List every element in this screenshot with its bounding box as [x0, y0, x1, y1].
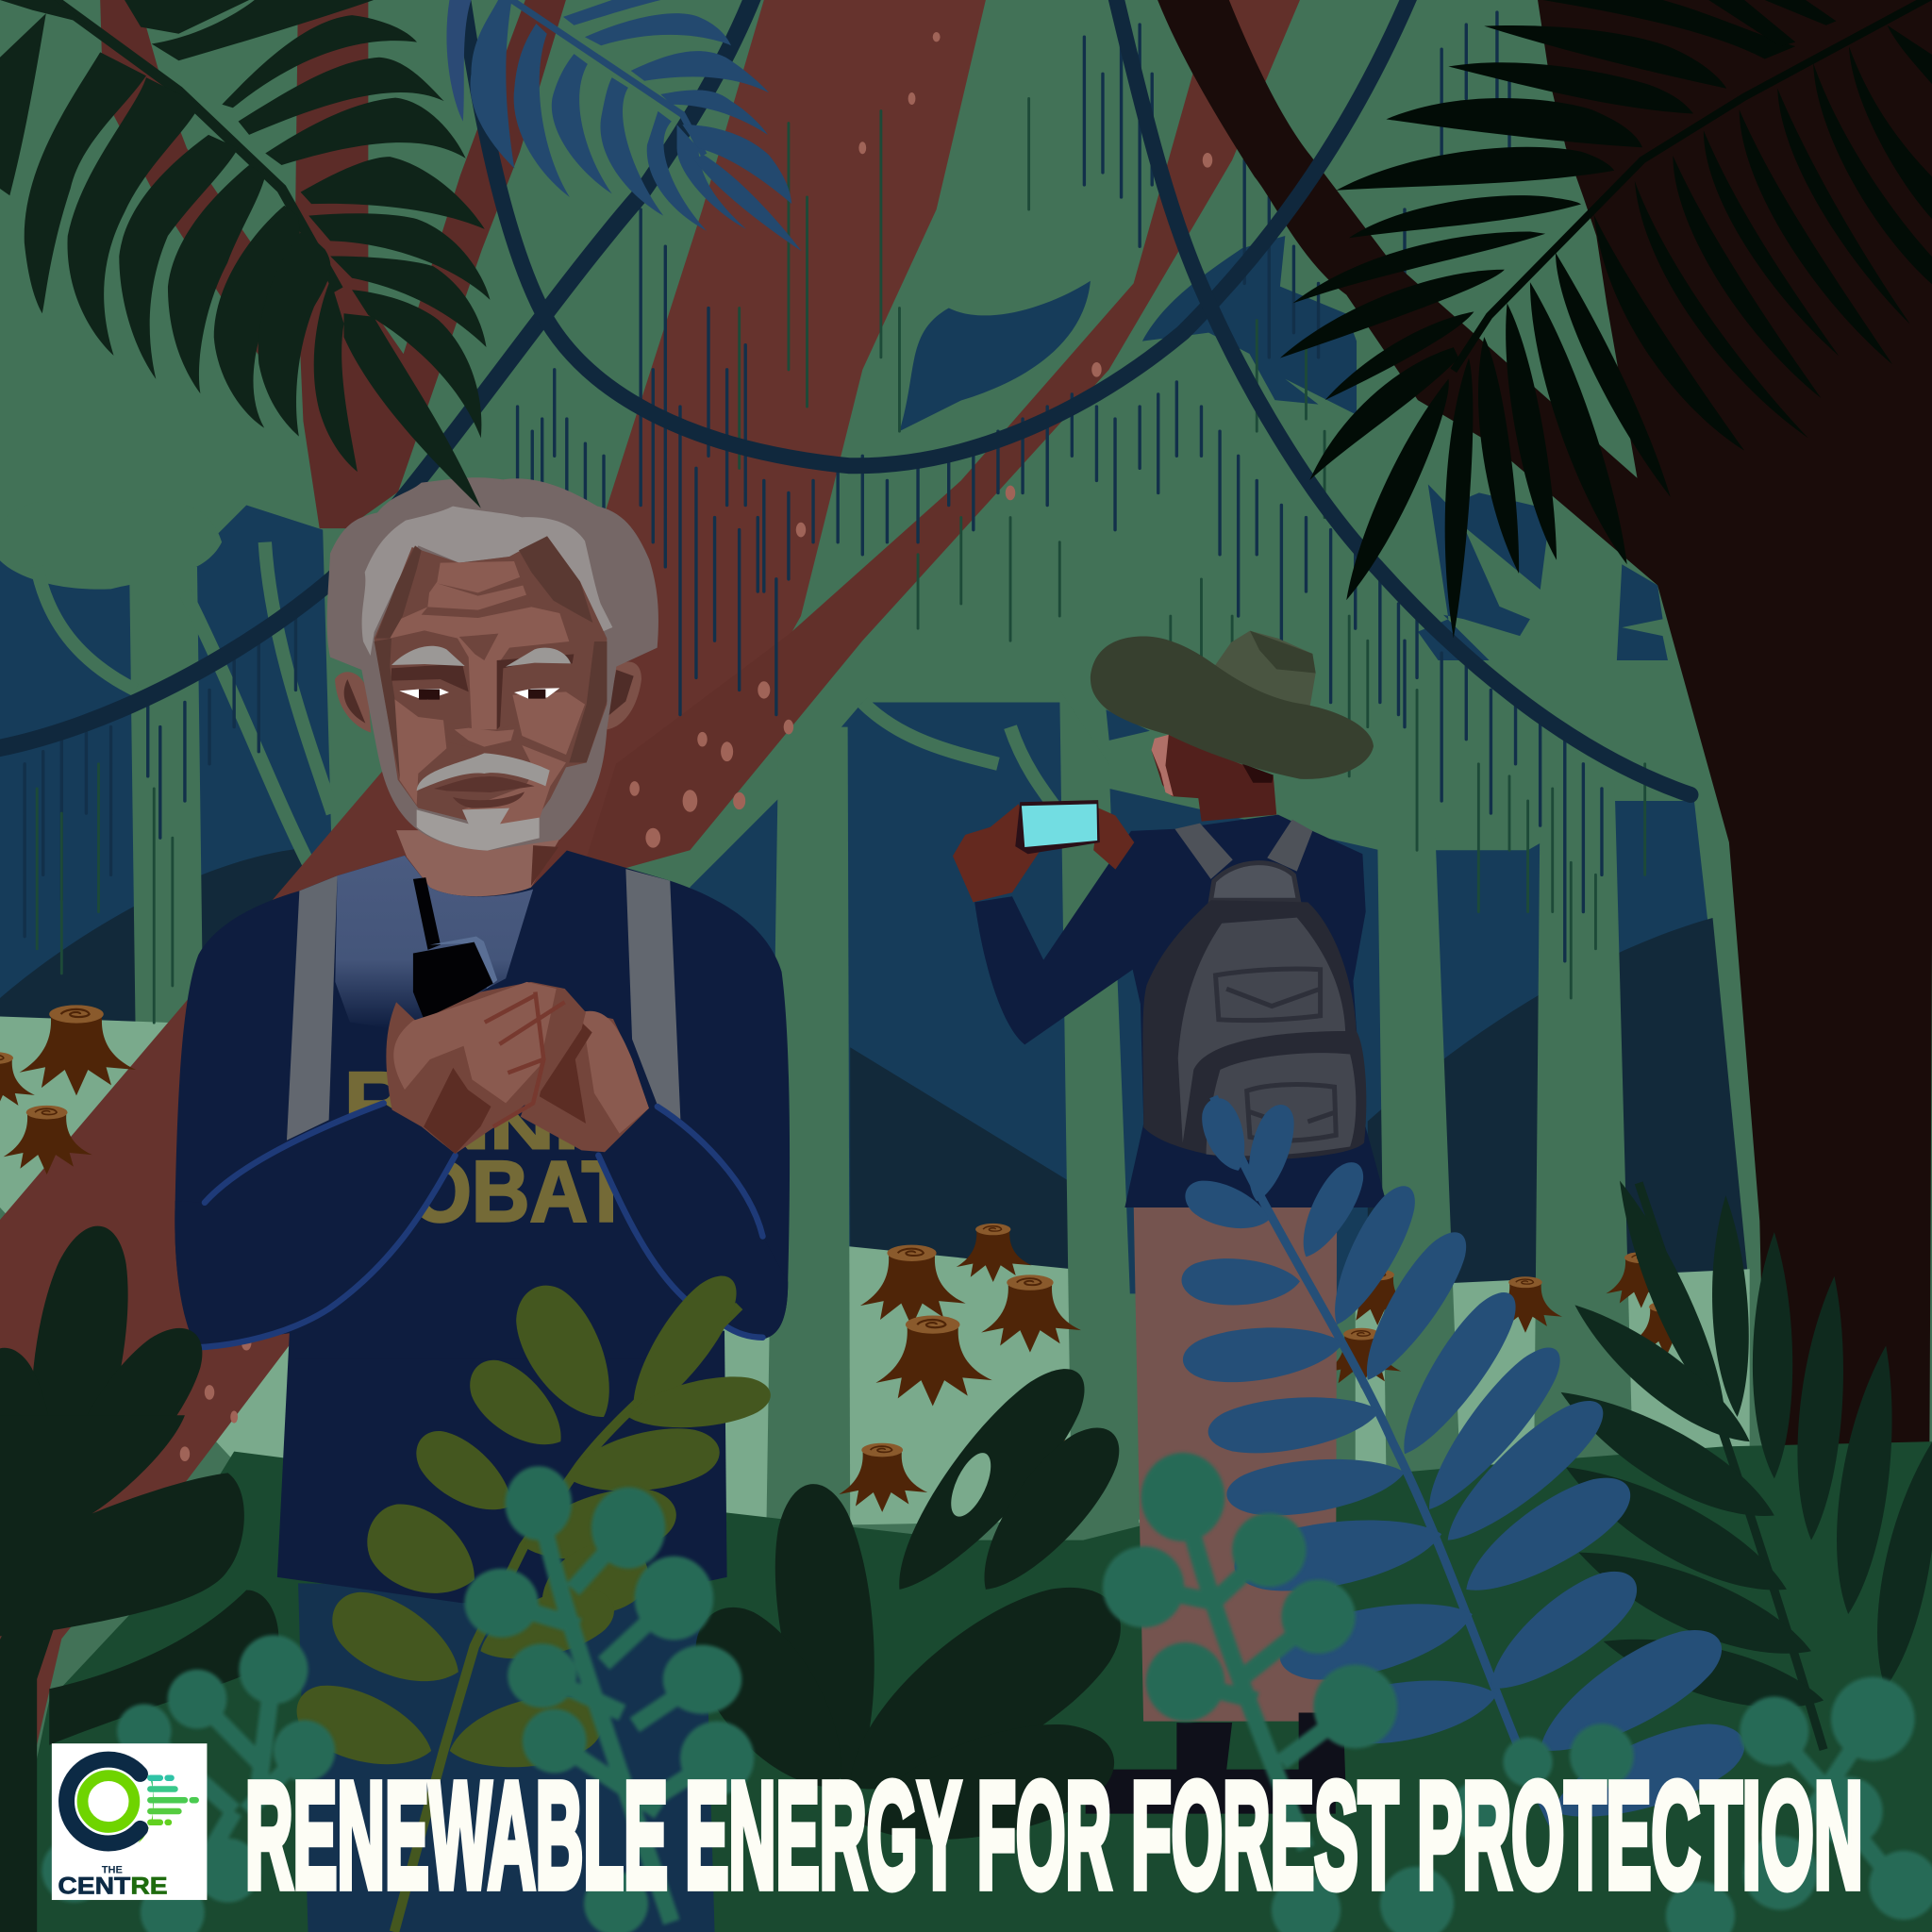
- trousers: [1134, 1201, 1337, 1722]
- phone: [1015, 800, 1100, 854]
- title: FOREST: [1131, 1751, 1398, 1919]
- sleeves: [175, 1103, 788, 1347]
- brown second trunk: [579, 0, 1300, 881]
- bottom left dark plant: [0, 1220, 279, 1932]
- blue patch by face: [1106, 709, 1150, 741]
- forehead wrinkles: [422, 577, 531, 660]
- brown branches behind top left palm: [100, 0, 566, 528]
- top left palm frond: [0, 0, 491, 508]
- title: FOR: [977, 1751, 1111, 1919]
- blue fern: [1179, 1093, 1755, 1842]
- neck: [396, 830, 565, 898]
- logo data lines: [150, 1778, 196, 1823]
- title: [245, 1751, 1863, 1919]
- title: RENEWABLE: [245, 1751, 668, 1919]
- logo teal wedge: [138, 1762, 154, 1843]
- shoes: [1086, 1713, 1345, 1814]
- brown main trunk: [0, 0, 986, 1848]
- title: ENERGY: [685, 1751, 961, 1919]
- eyebrows: [391, 646, 571, 667]
- vest straps: [287, 869, 680, 1141]
- sleeve trim: [196, 1103, 762, 1347]
- shirt lettering: R: [343, 1054, 409, 1155]
- vines: [0, 0, 1690, 794]
- right hand: [521, 1011, 649, 1152]
- far background: central blue hills: [690, 702, 1750, 1293]
- logo: The Centre: CENT RE: [58, 1874, 168, 1900]
- shirt lettering: [343, 1054, 631, 1240]
- ground: pale green clearing: [0, 1017, 1750, 1528]
- head: [1152, 735, 1276, 822]
- centre dark plant: [669, 1347, 1146, 1871]
- trunk spots: [180, 32, 1212, 1461]
- bottom right dark fern: [1546, 1174, 1932, 1750]
- goatee: [417, 808, 540, 851]
- face light planes: [390, 561, 585, 827]
- background leaves: blue: [899, 236, 1668, 660]
- far background: left blue forest: [0, 500, 333, 1047]
- shirt lettering: NNI: [425, 1095, 579, 1161]
- sweater: [175, 850, 790, 1358]
- outer hair and beard: [327, 477, 658, 851]
- teal eucalyptus plants: [42, 1453, 1932, 1932]
- left hand: [386, 982, 586, 1154]
- grey shirt: [335, 856, 533, 1029]
- lower torso: [277, 1331, 727, 1603]
- hands: [953, 804, 1134, 902]
- eyes: [399, 688, 559, 700]
- top right black palm frond: [1280, 0, 1932, 638]
- top blue palm frond: [446, 0, 802, 251]
- lips: [434, 776, 535, 808]
- sleeves and hands: [175, 982, 788, 1347]
- big dark tree on the right: [1158, 0, 1932, 1748]
- logo green ring: [83, 1775, 134, 1827]
- logo: The Centre: [52, 1743, 207, 1900]
- traced upper body: [175, 830, 790, 1358]
- logo C ring: [67, 1759, 150, 1843]
- ground: dark green hill: [0, 1441, 1932, 1932]
- head: [327, 477, 658, 851]
- radio: [413, 877, 497, 1024]
- hat: [1091, 631, 1374, 779]
- hanging moss strands: [25, 12, 1645, 1023]
- backpack: [1142, 820, 1366, 1160]
- person with hat taking a phone photo: [953, 631, 1388, 1814]
- eye sockets: [391, 654, 574, 729]
- face skin: [375, 536, 607, 827]
- moustache: [417, 753, 550, 791]
- shirt lettering: OBAT: [409, 1143, 631, 1240]
- upper body traced: [953, 631, 1388, 1208]
- olive leaf plant: [287, 1262, 774, 1932]
- logo wordmark: THE: [102, 1864, 123, 1875]
- man with radio: [175, 477, 790, 1932]
- nose: [446, 724, 522, 755]
- tree stumps: [0, 1005, 1703, 1512]
- face shadows: [375, 536, 607, 780]
- ears: [335, 662, 641, 733]
- lighter hair: [362, 507, 612, 656]
- jeans: [298, 1583, 715, 1932]
- jacket: [974, 815, 1388, 1208]
- green tree trunks: [766, 690, 1633, 1541]
